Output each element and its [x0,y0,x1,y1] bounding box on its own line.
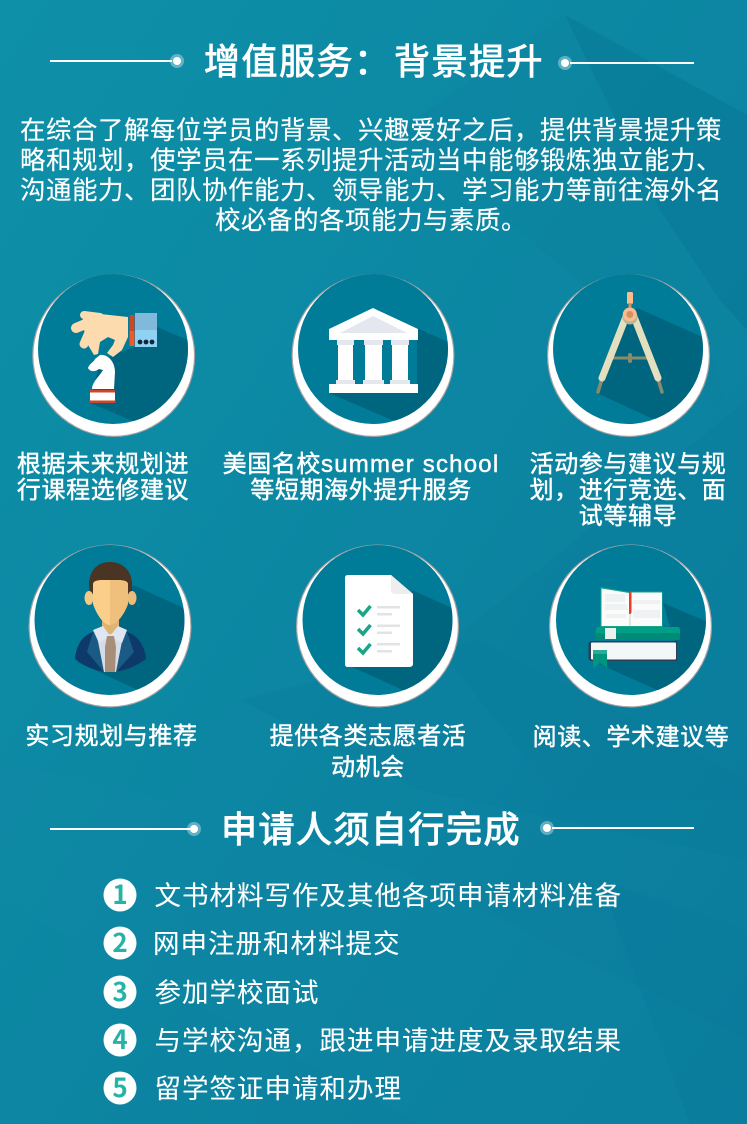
label: summer school: 等短期海外提升服务 [250,477,472,504]
heading: 申请人须自行完成: 申请人须自行完成 [221,809,521,850]
item 2: 2 [112,923,128,960]
icon: checklist document [296,544,459,708]
item 5 [104,1068,402,1105]
label: summer school [223,451,499,504]
label: 志愿者活动: 提供各类志愿者活 [270,723,466,750]
label: 课程选修: 根据未来规划进 [17,451,189,478]
item 3 [104,972,320,1009]
item 1: 1 [112,875,128,912]
item 5: 5 [112,1068,128,1105]
icon: businessman in suit [28,544,192,708]
label: 课程选修 [17,451,189,504]
heading: 增值服务 背景提升 [50,41,694,82]
icon: hand moving chess knight [32,274,195,437]
intro text block: 略和规划，使学员在一系列提升活动当中能够锻炼独立能力、 [20,147,722,175]
icon: stack of books [549,544,712,708]
label: summer school: 美国名校summer school [223,451,499,478]
label: 活动竞选: 试等辅导 [579,503,677,530]
icon: drawing compass [547,274,710,437]
icon: classical school building [292,274,454,437]
label: 活动竞选: 活动参与建议与规 [530,451,726,478]
label: 实习规划: 实习规划与推荐 [25,723,198,750]
item 3: 参加学校面试 [154,978,320,1008]
heading: 申请人须自行完成 [50,809,694,850]
label: 志愿者活动: 动机会 [331,754,405,781]
item 4: 4 [112,1020,128,1057]
item 3: 3 [112,972,128,1009]
item 1: 文书材料写作及其他各项申请材料准备 [154,881,622,911]
list: applicant tasks [104,875,622,1105]
intro text block: 沟通能力、团队协作能力、领导能力、学习能力等前往海外名 [20,177,722,205]
label: 阅读学术建议: 阅读、学术建议等 [533,724,729,751]
intro text block: 在综合了解每位学员的背景、兴趣爱好之后，提供背景提升策 [20,117,722,145]
item 2 [104,923,400,960]
heading: 增值服务 背景提升: 增值服务 [204,41,354,82]
label: 志愿者活动 [270,723,466,781]
label: 活动竞选 [530,451,726,530]
heading: 增值服务 背景提升: 背景提升 [394,41,544,82]
heading: 增值服务 背景提升: ： [354,41,392,82]
item 2: 网申注册和材料提交 [153,929,400,959]
item 4: 与学校沟通，跟进申请进度及录取结果 [154,1026,622,1056]
label: 课程选修: 行课程选修建议 [17,477,189,504]
label: 活动竞选: 划，进行竞选、面 [530,477,726,504]
intro text block [20,117,722,235]
item 5: 留学签证申请和办理 [154,1074,402,1104]
intro text block: 校必备的各项能力与素质。 [215,207,527,235]
